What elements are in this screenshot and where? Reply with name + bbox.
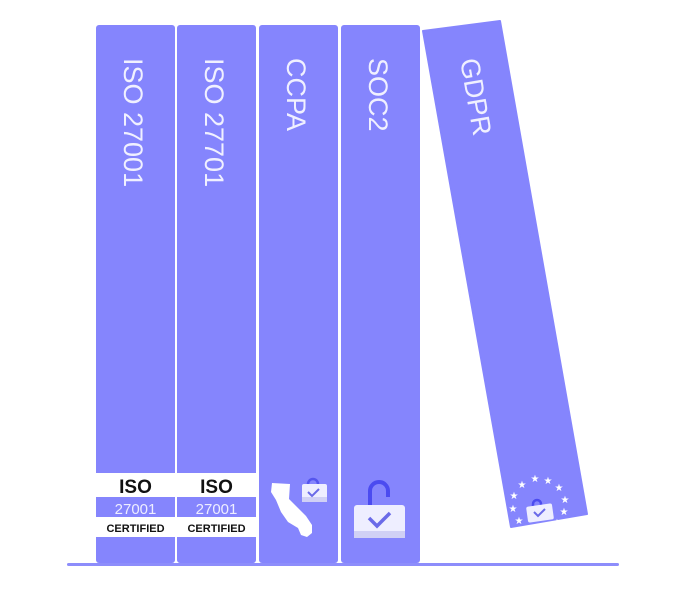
icon: lock: [354, 482, 405, 538]
book: CCPA: CCPA: [281, 58, 311, 131]
icon: california: [271, 483, 312, 537]
book: ISO 27701: ISO 27701: [199, 58, 229, 187]
badge: ISO 27001 certified: 27001: [196, 501, 237, 518]
badge: ISO 27001 certified: [96, 473, 175, 537]
icon: EU stars lock: ★: [560, 507, 569, 518]
book: CCPA: [259, 25, 338, 563]
book: ISO 27701: [177, 25, 256, 563]
book: ISO 27001: [96, 25, 175, 563]
icon: EU stars lock: ★: [509, 504, 518, 515]
badge: ISO 27001 certified: ISO: [200, 477, 233, 498]
badge: ISO 27001 certified: CERTIFIED: [187, 523, 246, 535]
book: SOC2: SOC2: [363, 58, 393, 132]
icon: EU stars lock: ★: [515, 516, 524, 527]
badge: ISO 27001 certified: [177, 473, 256, 537]
badge: ISO 27001 certified: ISO: [119, 477, 152, 498]
icon: small lock: [302, 479, 327, 502]
icon: EU stars lock: [509, 474, 570, 536]
icon: EU stars lock: ★: [544, 476, 553, 487]
icon: EU stars lock: ★: [527, 524, 536, 535]
icon: EU stars lock: ★: [553, 518, 562, 529]
badge: ISO 27001 certified: 27001: [115, 501, 156, 518]
badge: ISO 27001 certified: CERTIFIED: [106, 523, 165, 535]
icon: EU stars lock: ★: [518, 480, 527, 491]
book: SOC2: [341, 25, 420, 563]
icon: EU stars lock: ★: [540, 525, 549, 536]
book: ISO 27001: ISO 27001: [118, 58, 148, 187]
icon: EU stars lock: ★: [531, 474, 540, 485]
icon: EU stars lock: ★: [555, 483, 564, 494]
icon: EU stars lock: ★: [510, 491, 519, 502]
icon: EU stars lock: ★: [561, 495, 570, 506]
book: GDPR: GDPR: [454, 56, 497, 138]
shelf: [67, 563, 619, 566]
book: GDPR: [423, 21, 587, 536]
